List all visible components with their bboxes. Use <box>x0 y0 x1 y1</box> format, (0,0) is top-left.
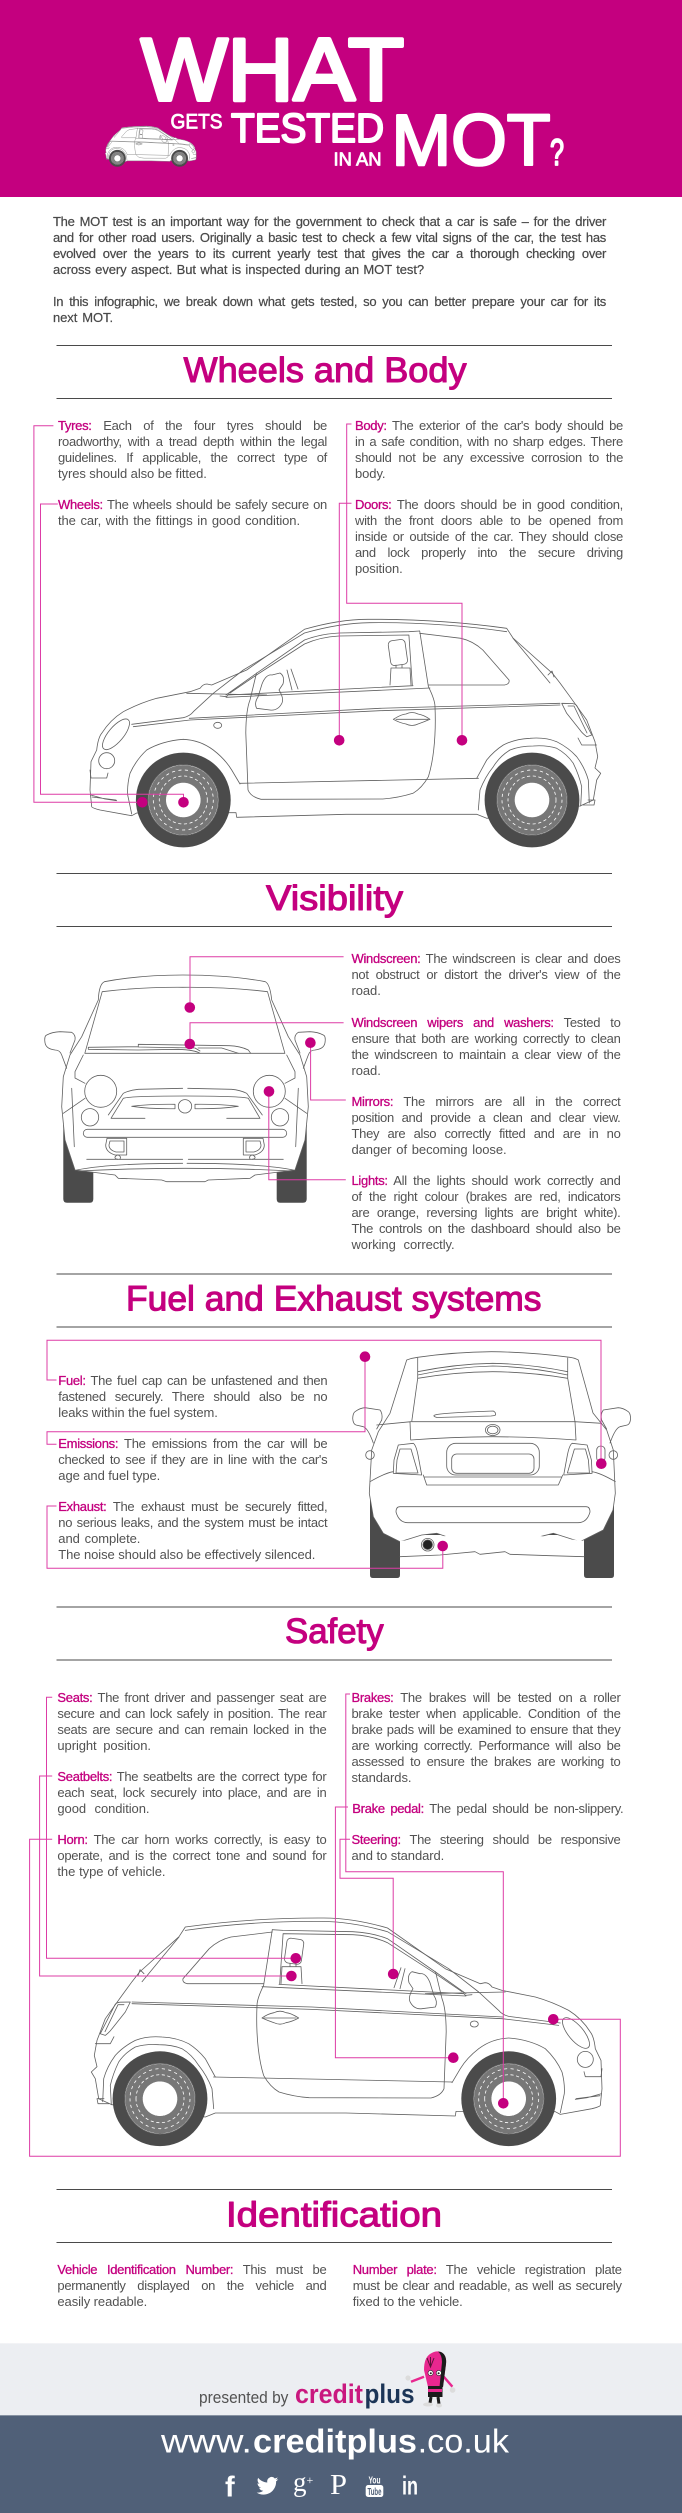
intro text: evolved over the years to its current yearly test that gives the car a thorough checking over <box>53 246 606 261</box>
footer band <box>0 2415 682 2513</box>
creditplus logo: plus <box>364 2379 414 2409</box>
text: mirrors: position and provide a clean and clear view. <box>352 1110 620 1125</box>
text: brakes: brake pads will be examined to ensure that they <box>352 1722 620 1737</box>
text: windscreen: Windscreen: The windscreen is clear and does <box>352 951 620 966</box>
presented by band <box>0 2343 682 2415</box>
text: wipers: Windscreen wipers and washers: Tested to <box>352 1015 620 1030</box>
panel: wheels and body <box>34 346 635 847</box>
text: seatbelts <box>57 1769 337 1821</box>
heading: fuel and exhaust: Fuel and Exhaust systems <box>126 1280 542 1318</box>
text: body <box>355 418 635 486</box>
text: exhaust: Exhaust: The exhaust must be securely fitted, <box>58 1499 327 1514</box>
panel: safety <box>30 1607 632 2156</box>
text: vehicle identification number: permanently displayed on the vehicle and <box>57 2278 326 2293</box>
text: brakes: standards. <box>352 1770 411 1785</box>
text: wheels: the car, with the fittings in good condition. <box>58 513 300 528</box>
text: doors <box>355 497 635 581</box>
callout lines and dots <box>47 1340 607 1568</box>
text: tyres <box>58 418 338 486</box>
text: seats: secure and can lock safely in position. The rear <box>57 1706 326 1721</box>
callout lines and dots <box>184 957 346 1180</box>
text: tyres: Tyres: Each of the four tyres should be <box>58 418 327 433</box>
icon: google plus: + <box>306 2473 314 2487</box>
text: tyres: roadworthy, with a tread depth within the legal <box>58 434 327 449</box>
icon: youtube: You <box>368 2476 380 2486</box>
text: brakes: brake tester when applicable. Condition of the <box>352 1706 620 1721</box>
text: wipers <box>352 1015 632 1083</box>
icon: facebook: f <box>225 2472 235 2504</box>
text: doors: position. <box>355 561 403 576</box>
icon: mascot <box>405 2351 455 2408</box>
text: wipers: the windscreen to maintain a clear view of the <box>352 1047 620 1062</box>
text: exhaust <box>58 1499 338 1567</box>
text: tyres: guidelines. If applicable, the correct type of <box>58 450 327 465</box>
text: steering: Steering: The steering should be responsive <box>352 1832 620 1847</box>
car front view <box>45 975 325 1203</box>
text: number plate: Number plate: The vehicle registration plate <box>353 2262 622 2277</box>
text: exhaust: no serious leaks, and the system must be intact <box>58 1515 327 1530</box>
header banner <box>0 0 682 197</box>
text: fuel: leaks within the fuel system. <box>58 1405 218 1420</box>
car rear view <box>353 1352 631 1578</box>
text: brake pedal: Brake pedal: The pedal should be non-slippery. <box>352 1801 623 1816</box>
text: fuel: fastened securely. There should also be no <box>58 1389 327 1404</box>
intro text: next MOT. <box>53 310 113 325</box>
icon: youtube: Tube <box>368 2487 382 2498</box>
text: doors: Doors: The doors should be in good condition, <box>355 497 623 512</box>
heading: wheels and body: Wheels and Body <box>184 351 467 390</box>
text: windscreen <box>352 951 632 1003</box>
text: horn: the type of vehicle. <box>57 1864 165 1879</box>
text: fuel <box>58 1373 338 1425</box>
text: doors: and lock properly into the secure driving <box>355 545 623 560</box>
text: lights: are orange, reversing lights are bright white). <box>352 1205 620 1220</box>
text: seatbelts: Seatbelts: The seatbelts are the correct type for <box>57 1769 326 1784</box>
text: doors: with the front doors able to be opened from <box>355 513 623 528</box>
panel: identification <box>56 2190 633 2314</box>
text: body: body. <box>355 466 385 481</box>
text: seats: upright position. <box>57 1738 151 1753</box>
text: seats: seats are secure and can remain locked in the <box>57 1722 326 1737</box>
icon: small car <box>105 126 196 167</box>
text: emissions <box>58 1436 338 1488</box>
text: number plate: must be clear and readable, as well as securely <box>353 2278 622 2293</box>
text: windscreen: not obstruct or distort the driver's view of the <box>352 967 620 982</box>
icon: pinterest: P <box>330 2470 347 2501</box>
text: emissions: checked to see if they are in line with the car's <box>58 1452 327 1467</box>
text: mirrors <box>352 1094 632 1162</box>
panel: visibility <box>45 874 631 1257</box>
text: horn <box>57 1832 337 1884</box>
text: lights: working correctly. <box>352 1237 454 1252</box>
text: body: Body: The exterior of the car's body should be <box>355 418 623 433</box>
text: wipers: ensure that both are working correctly to clean <box>352 1031 620 1046</box>
text: windscreen: road. <box>352 983 381 998</box>
text: number plate: fixed to the vehicle. <box>353 2294 463 2309</box>
text: emissions: Emissions: The emissions from the car will be <box>58 1436 327 1451</box>
website url: www. <box>160 2423 252 2460</box>
text: brakes: Brakes: The brakes will be tested on a roller <box>352 1690 620 1705</box>
text: exhaust: and complete. <box>58 1531 140 1546</box>
text: seatbelts: good condition. <box>57 1801 149 1816</box>
text: seats <box>57 1690 337 1758</box>
text: horn: operate, and is the correct tone and sound for <box>57 1848 326 1863</box>
title: question mark: ? <box>550 132 564 173</box>
creditplus logo <box>295 2379 414 2409</box>
panel: fuel and exhaust systems <box>47 1274 631 1578</box>
text: tyres: tyres should also be fitted. <box>58 466 207 481</box>
text: vehicle identification number: easily readable. <box>57 2294 147 2309</box>
text: wheels: Wheels: The wheels should be safely secure on <box>58 497 327 512</box>
title: MOT: MOT <box>392 101 550 181</box>
title: WHAT: WHAT <box>141 20 404 119</box>
text: horn: Horn: The car horn works correctly, is easy to <box>57 1832 326 1847</box>
text: lights: of the right colour (brakes are red, indicators <box>352 1189 620 1204</box>
callout lines and dots <box>34 424 467 808</box>
intro text: The MOT test is an important way for the government to check that a car is safe – for the driver <box>53 214 606 229</box>
text: lights <box>352 1173 632 1257</box>
heading: safety: Safety <box>285 1612 384 1651</box>
callout lines and dots <box>30 1694 620 2156</box>
text: seats: Seats: The front driver and passenger seat are <box>57 1690 326 1705</box>
car side view <box>90 619 601 847</box>
text: mirrors: Mirrors: The mirrors are all in the correct <box>352 1094 620 1109</box>
icon: youtube <box>366 2476 383 2498</box>
intro text: and for other road users. Originally a basic test to check a few vital signs of the car, the test has <box>53 230 606 245</box>
text: wheels <box>58 497 338 533</box>
title: IN AN: IN AN <box>334 150 382 170</box>
text: vehicle identification number: Vehicle Identification Number: This must be <box>57 2262 326 2277</box>
text: brakes: are working correctly. Performance will also be <box>352 1738 620 1753</box>
icon: twitter <box>257 2477 278 2495</box>
text: mirrors: They are also correctly fitted and are in no <box>352 1126 620 1141</box>
text: body: should not be any excessive corrosion to the <box>355 450 623 465</box>
car side view mirrored <box>91 1918 602 2146</box>
social icons <box>225 2467 418 2504</box>
creditplus logo: credit <box>295 2379 363 2409</box>
title: GETS: GETS <box>170 110 222 134</box>
text: lights: Lights: All the lights should work correctly and <box>352 1173 620 1188</box>
website url <box>160 2423 510 2460</box>
website url: .co.uk <box>418 2423 510 2460</box>
website url: creditplus <box>253 2423 417 2460</box>
presented by text: presented by <box>199 2388 289 2407</box>
text: steering: and to standard. <box>352 1848 444 1863</box>
text: brakes: assessed to ensure the brakes are working to <box>352 1754 620 1769</box>
text: vehicle identification number <box>57 2262 337 2314</box>
intro text <box>53 214 618 330</box>
text: lights: The controls on the dashboard should also be <box>352 1221 620 1236</box>
text: seatbelts: each seat, lock securely into place, and are in <box>57 1785 326 1800</box>
heading: identification: Identification <box>226 2196 442 2235</box>
text: mirrors: danger of becoming loose. <box>352 1142 506 1157</box>
text: emissions: age and fuel type. <box>58 1468 160 1483</box>
text: steering <box>352 1832 632 1868</box>
text: body: in a safe condition, with no sharp edges. There <box>355 434 623 449</box>
text: wipers: road. <box>352 1063 381 1078</box>
icon: linkedin: in <box>402 2470 418 2500</box>
intro text: across every aspect. But what is inspected during an MOT test? <box>53 262 424 277</box>
intro text: In this infographic, we break down what gets tested, so you can better prepare your car for its <box>53 294 606 309</box>
heading: visibility: Visibility <box>266 879 404 918</box>
title: TESTED: TESTED <box>231 105 384 151</box>
text: brakes <box>352 1690 632 1790</box>
text: exhaust: The noise should also be effectively silenced. <box>58 1547 315 1562</box>
icon: google plus: g <box>293 2467 306 2497</box>
text: doors: inside or outside of the car. They should close <box>355 529 623 544</box>
text: fuel: Fuel: The fuel cap can be unfastened and then <box>58 1373 327 1388</box>
text: number plate <box>353 2262 633 2314</box>
